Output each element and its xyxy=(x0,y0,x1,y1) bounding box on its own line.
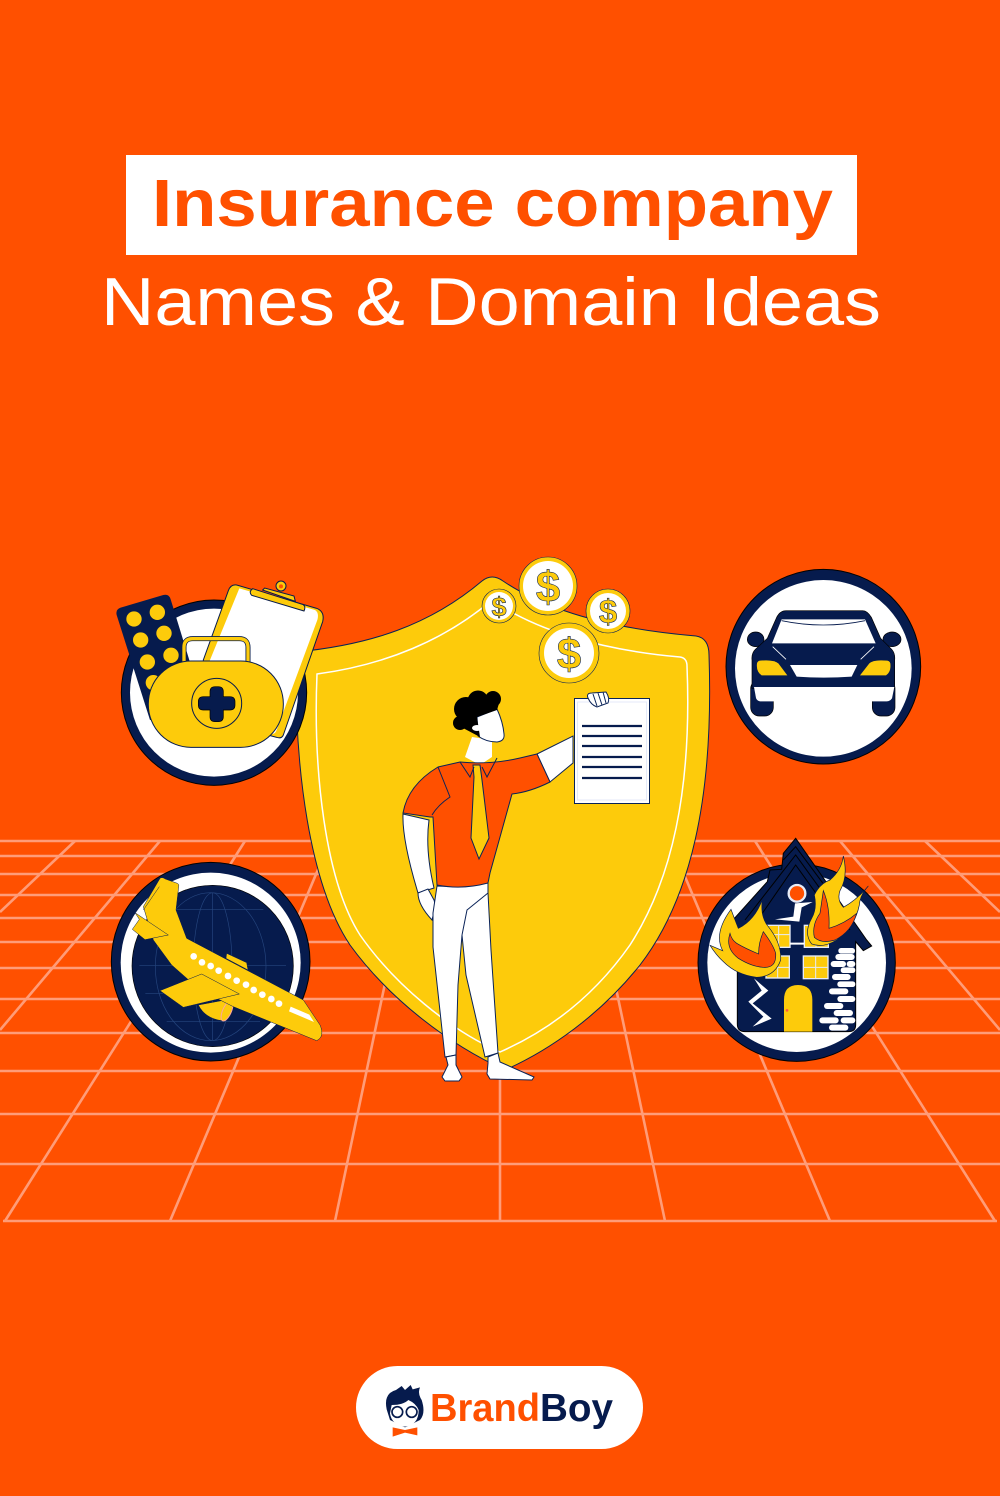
coin large top: $ xyxy=(536,563,560,612)
bricks xyxy=(819,948,855,1031)
feet xyxy=(442,1053,534,1081)
windshield xyxy=(772,619,876,643)
logo mascot xyxy=(386,1385,423,1437)
logo text: Boy xyxy=(540,1387,613,1430)
clipboard xyxy=(200,581,323,738)
cracks xyxy=(748,978,772,1027)
left arm and hand xyxy=(403,814,435,920)
logo pill xyxy=(356,1366,643,1449)
ear xyxy=(472,725,482,731)
right arm xyxy=(537,736,573,782)
hand fingers xyxy=(588,692,609,707)
airplane xyxy=(132,878,322,1041)
tie xyxy=(471,765,489,859)
house xyxy=(730,838,872,1032)
trousers xyxy=(433,880,498,1057)
house circle badge xyxy=(698,864,895,1061)
title line 2: Names & Domain Ideas xyxy=(101,264,881,340)
face xyxy=(477,709,504,742)
logo badge xyxy=(356,1366,643,1449)
windows xyxy=(766,925,828,979)
hair xyxy=(453,690,501,737)
medical circle badge xyxy=(121,600,307,785)
pill pack xyxy=(116,595,207,720)
left flame xyxy=(710,899,781,977)
bumper xyxy=(754,687,894,701)
shirt xyxy=(403,754,550,887)
globe lines xyxy=(139,893,286,1041)
car circle badge xyxy=(726,569,921,764)
icon: car circle xyxy=(726,569,921,764)
coins xyxy=(482,557,630,683)
coin small left: $ xyxy=(491,592,507,622)
document xyxy=(574,698,650,804)
title xyxy=(101,155,881,340)
neck xyxy=(465,737,492,765)
title highlight box xyxy=(126,155,857,255)
round window xyxy=(789,885,805,902)
grille xyxy=(790,665,857,678)
shield xyxy=(296,577,710,1070)
person holding document xyxy=(403,690,650,1081)
icon: burning house circle xyxy=(698,838,895,1061)
headlights xyxy=(757,660,787,675)
car xyxy=(747,611,901,716)
right flame xyxy=(807,856,868,945)
coin large bottom: $ xyxy=(557,630,581,679)
title line 1: Insurance company xyxy=(152,166,833,241)
coin large bottom xyxy=(539,623,599,683)
icon: airplane circle xyxy=(111,862,322,1061)
coin large top xyxy=(519,557,577,615)
coin small right xyxy=(586,589,630,633)
icon: medical kit circle xyxy=(116,581,323,785)
medical bag xyxy=(148,639,283,747)
perspective floor grid xyxy=(0,841,1000,1221)
collar xyxy=(460,758,497,777)
coin small left xyxy=(482,589,516,623)
door xyxy=(784,985,812,1032)
airplane circle badge xyxy=(111,862,310,1061)
logo text: Brand xyxy=(430,1387,540,1430)
coin small right: $ xyxy=(599,593,617,630)
